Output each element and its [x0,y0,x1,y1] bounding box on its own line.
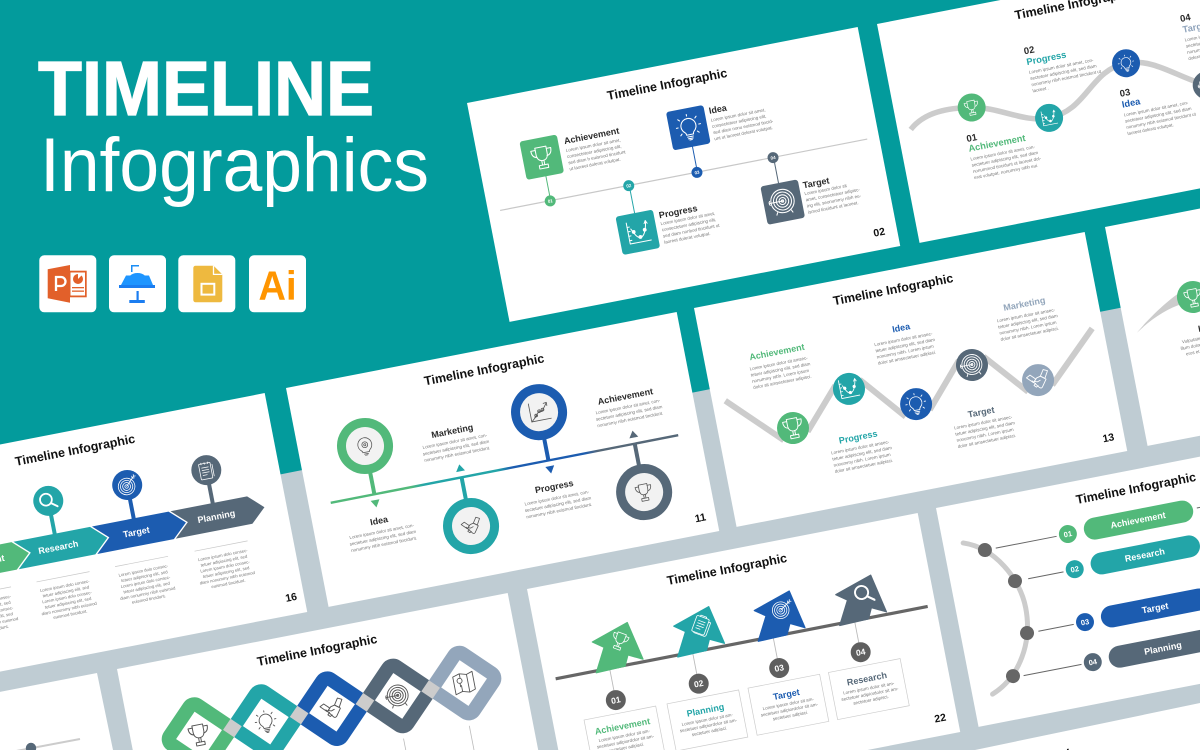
step 4 text: Target [802,175,830,190]
stem and circle: planning [189,453,228,508]
card 3: sectetuer adipiordolor sit am- [760,702,819,718]
panel: slide with pills [936,432,1200,727]
subtitle: Infographics: Infographics [40,123,429,208]
label: Target: nonummy nibh. Lorem ipsum [956,427,1014,443]
label: Achievement: Achievement [597,386,654,407]
step 1 text: ut laoreet dolerat volutpat. [569,157,621,172]
triangle: slate [628,430,638,438]
row 1 [976,494,1200,562]
panel: slide wave timeline (top right) [877,0,1200,243]
row 4 [1004,627,1200,690]
diamond 5 [425,644,503,722]
icon: PowerPoint [39,255,96,312]
title: Timeline Infographic [256,632,378,669]
step 4 icon box: 04 [770,155,776,161]
panel: slide 11 [286,312,719,607]
label: Achievement: Lorem ipsum dolor sit amsec- [749,355,809,371]
diamond 1 [160,696,238,750]
step 1 text: sed diam h euismod tincidunt [568,149,627,165]
label: Progress: sectetuer adipiscing elit, sed diam [524,495,592,513]
step 4: 04 [1179,12,1192,25]
step 3 text [708,94,775,141]
label: Progress: tetuer adipiscing elit, sed diam [832,445,893,462]
connector lines [404,726,476,750]
page number: 16 [284,591,298,605]
step 4 [1179,1,1200,61]
column text 4: euismod tincidunt. [211,578,246,589]
column text 3: euismod tincidunt. [131,593,166,605]
panel: far left slide [0,673,113,750]
connector 3: 03 [774,662,785,674]
label: Target: Target [967,405,995,420]
label: Marketing: Marketing [1002,295,1046,313]
connector 3 [763,635,791,680]
step 3: nonummy nibh euismod tincidunt ut [1126,111,1197,130]
card 4: Lorem ipsum dolor sit am- [843,681,895,696]
label: Idea [871,317,938,366]
row 2: 02 [1070,564,1080,575]
node 2 [1033,101,1065,134]
column text 3: diam nonummy nibh euismod [120,585,176,601]
curve [1131,292,1187,333]
card 2: sectetuer adipisci. [691,725,728,737]
arrow 1 [588,621,644,673]
main title: TIMELINE: TIMELINE [38,46,374,132]
label: Idea: nonummy nibh euismod tincidunt. [351,535,417,553]
label: Idea: Idea [369,514,390,527]
arrow 4 [831,574,887,626]
column text 3: tetuer adipiscing elit, sed [121,569,169,583]
label: Marketing: Lorem ipsum dolor sit amet, con- [422,432,488,450]
step 4 icon box [754,148,805,225]
label: Idea: tetuer adipiscing elit, sed diam [875,337,936,353]
step 2 text: consectetuer adipiscing elit, [661,217,717,232]
arc [963,534,1041,694]
arrow: Planning: Planning [197,508,236,525]
node 2 [830,370,868,408]
diamond 2 [227,683,305,750]
step 1 [966,121,1043,180]
step 2 icon box: 02 [626,183,632,189]
step 2 text [658,199,722,245]
node 1 [774,409,812,447]
label: Progress: dolor sit amsectetuer adipisci. [834,458,893,474]
card 1: Achievement [594,716,651,737]
icon: Adobe Illustrator [249,255,306,312]
card 4: sectetuer adipisci. [853,694,889,706]
panel: slide 13 [694,232,1127,527]
step 1: erat volutpat. nonummy nibh eui. [974,163,1039,180]
panel: slide with diamonds [117,593,550,750]
step 1 text [563,125,628,172]
step 3: Idea [1121,96,1142,110]
card 3: Target [772,687,801,702]
junction 2 [288,704,310,726]
column text 2: diam nonummy nibh euismod [41,601,98,616]
label: Target [951,401,1018,449]
column text 3 [114,556,177,607]
arrow 2 [669,605,725,657]
title: Timeline Infographic [606,66,728,103]
column text 4: tetuer adipiscing elit, sed [200,554,248,568]
arrow: Achievement [0,539,32,585]
pin 2 [438,473,499,554]
panel: slide 22 [527,513,960,750]
panel: far right slide [1105,151,1200,446]
panel: slide 02 [467,27,900,322]
icon: Keynote [109,255,166,312]
step 1: nonummod tincidunt ut laoreet dol- [972,156,1042,174]
junction 3 [354,691,376,713]
step 1: 01 [966,132,979,145]
column text 4 [193,540,257,591]
page number: 11 [694,511,707,525]
step 2 icon box [609,177,660,255]
step 4 text: ing elit, seonummy nibh eu- [806,193,862,209]
label: Achievement [592,385,664,428]
step 2: laoreet . [1032,85,1049,93]
title: Timeline Infographic [1075,470,1197,507]
junction 4 [420,678,442,701]
step 1: Lorem ipsum dolor sit amet, con- [970,144,1036,162]
label: Target: tetuer adipiscing elit, sed diam [955,420,1016,437]
title: Timeline Infographic [832,271,954,308]
label: Achievement [747,341,813,390]
step 2: sectetuer adipiscing elit, sed diam [1030,63,1097,81]
arrow: Target: Target [122,525,150,540]
label: Idea: nonummy nibh. Lorem ipsum [876,344,934,360]
label: Progress: Progress [534,478,574,495]
label: Idea: sectetuer adipiscing elit, sed diam [349,529,417,547]
row 2 [1006,534,1200,592]
step 3: 03 [1119,87,1131,100]
page number: 22 [933,711,947,726]
page number: 02 [872,226,886,240]
background: teal band [0,0,1200,530]
node 4 [1190,69,1200,102]
step 1 icon box: 01 [547,198,554,204]
step 3 [1119,75,1198,136]
wave line [906,35,1200,147]
arrow: Target [92,509,189,554]
card 2: Planning [686,702,725,719]
label: Idea [345,509,418,553]
label: Achievement: tetuer adipiscing elit, sed diam [750,361,811,378]
step 3 text: consectetuer adipiscing elit, [712,113,767,129]
label: Marketing: dolor sit amsectetuer adipisci. [1000,326,1059,342]
label: Idea: Idea [891,321,912,334]
arrow: Research [13,524,110,569]
label: Progress: Lorem ipsum dolor sit amet, con- [524,489,590,507]
step 2: Lorem ipsum dolor sit amet, con- [1029,57,1094,75]
step 2 [1023,33,1103,94]
label: Achievement: nonummy nibh euismod tincidunt. [597,411,664,428]
column text 3: Lorem ipsum dolo consec- [118,563,169,578]
step 1 text: consectetuer adipiscing elit, [567,144,622,159]
stem and circle: target [110,467,149,523]
step 1: Achievement [968,133,1026,154]
column text 1 [0,586,20,637]
card 4: sectetuer adipiordolor sit am- [841,686,899,702]
zigzag line [725,328,1102,450]
card 1: Lorem ipsum dolor sit am- [598,728,651,743]
column text 4: tetuer adipiscing elit, sed [202,565,250,579]
pin 3 [512,385,571,465]
label: Idea: Lorem ipsum dolor sit amet, con- [349,523,415,540]
step 3: Lorem ipsum dolor sit amet, con- [1123,100,1189,118]
card 3: sectetuer adipisci. [772,710,809,721]
label: Achievement: nonummy nibh. Lorem ipsum [752,368,810,384]
label: Progress: Lorem ipsum dolor sit amsec- [831,439,890,455]
connector 4: 04 [855,646,867,658]
node 3 [1110,47,1142,80]
step 3: sectetuer adipiscing elit, sed diam [1125,106,1192,124]
step 2: Progress [1026,50,1067,67]
label: Achievement: sectetuer adipiscing elit, sed diam [595,404,663,422]
step 2: nonummy nibh euismod tincidunt ut [1031,69,1102,87]
panel: bottom right slide [975,703,1200,750]
step 4 text: amet, consectetuer adipisc- [805,187,861,202]
step 1 text: Lorem ipsum dolor sit amet, [565,137,621,153]
row 1: Achievement [1110,510,1166,530]
row 3 [1018,587,1200,645]
card 1: sectetuer adipiordolor sit am- [596,733,655,750]
step 2 text: laoreet dolerat volutpat. [664,231,711,245]
step 2 text: Progress [658,203,698,220]
label: Idea: dolor sit amsectetuer adipisci. [877,350,937,366]
label: Progress: nonummy nibh euismod tincidunt. [526,502,593,519]
label: Marketing: Lorem ipsum dolor sit amsec- [997,307,1056,323]
panel: slide 16 [0,393,307,688]
row 4: 04 [1088,657,1099,668]
label: Progress [828,426,895,474]
label: Marketing: sectetuer adipiscing elit, sed diam [422,439,490,457]
column text 4: Lorem ipsum dolo consec- [200,559,251,574]
card 3: Lorem ipsum dolor sit am- [762,696,815,711]
label: Progress [520,475,593,520]
card 2: Lorem ipsum dolor sit am- [681,712,734,727]
label: Progress: Progress [838,428,878,446]
step 3 icon box [666,105,717,181]
row 2: Research [1124,546,1166,564]
diamond 3 [293,670,371,748]
column text 2: tetuer adipiscing elit, sed [44,596,92,610]
step 3 text: Lorem ipsum dolor sit amet, [710,107,766,123]
label: Marketing [994,293,1061,342]
step 2: 02 [1023,45,1035,57]
triangle: green [371,499,381,508]
title: Timeline Infographic [666,551,788,588]
step 1 icon box [519,134,570,210]
node 5 [1019,361,1057,399]
label: Marketing: nonummy nibh. Lorem ipsum [999,320,1057,336]
column text 3: tetuer adipiscing elit, sed [123,580,171,595]
label: Achievement: Achievement [748,342,805,362]
label: Marketing: tetuer adipiscing elit, sed diam [998,313,1058,330]
node: trophy [1174,278,1200,316]
card 2: sectetuer adipiordolor sit am- [679,717,738,733]
pin 1 [337,418,397,499]
label: Achievement: dolor sit amsectetuer adipisci. [753,374,812,390]
connector 4 [845,619,872,664]
column text 2: tetuer adipiscing elit, sed [42,584,90,598]
gradient timeline axis [330,434,678,504]
step 1: sectetuer adipiscing elit, sed diam [971,150,1039,168]
label: Marketing: nonummy nibh euismod tincidunt. [424,445,491,463]
column text 4: Lorem ipsum dolo consec- [198,548,249,562]
column text 2: Lorem ipsum dolo consec- [42,590,93,604]
step 3 text: Idea [708,102,729,116]
label: Target: dolor sit amsectetuer adipisci. [957,433,1016,449]
card 3 [748,674,829,735]
step 3 icon box: 03 [694,170,700,176]
label: Target: Lorem ipsum dolor sit amsec- [954,414,1013,431]
row 3: Target [1141,601,1169,615]
column text 2 [35,571,99,622]
column text 2: euismod tincidunt. [53,608,88,620]
triangle: teal [455,463,465,472]
junction 1 [221,717,244,739]
arrow: Planning [170,493,267,539]
row 4: Planning [1143,640,1183,657]
node 1 [955,91,988,124]
thick axis [555,605,928,680]
connector 2 [683,651,710,695]
step 2 text: sed diam nonbod tincidunt ut [663,223,721,239]
icon: Google Slides [178,255,235,312]
card 1 [584,706,665,750]
column text 4: diam nonummy nibh euismod [199,570,256,586]
arrow: Research: Research [37,538,79,556]
card 2 [667,690,748,750]
step 3 text: sed diam nonu euismod tincid- [713,118,774,135]
arrow 3 [750,589,806,641]
card 4: Research [846,670,888,688]
node 3 [897,385,935,423]
row 3: 03 [1080,617,1090,627]
column text 2: Lorem ipsum dolo consec- [40,578,91,593]
column text 3: Lorem ipsum dolo consec- [120,574,171,589]
connector 1 [600,667,628,712]
card 4 [828,659,909,720]
row 1: 01 [1063,529,1073,539]
diamond 4 [359,657,437,735]
step 3: laoreet dolerat volutpat. [1127,122,1174,136]
label: Marketing: Marketing [430,422,474,440]
step 3 text: unt ut laoreet dolerat volutpat. [714,125,773,141]
pin 4 [612,439,672,520]
label: Idea: Lorem ipsum dolor sit amsec- [874,331,933,347]
timeline axis [500,139,867,211]
label: Marketing [419,420,491,463]
step 1 text: Achievement [563,126,620,146]
step 4 text: ismod tincidunt ut laoreet. [808,200,859,215]
triangle: blue [545,465,556,474]
step 4 text: Lorem ipsum dolor sit [804,183,848,196]
node 4 [953,346,991,384]
page number: 13 [1102,431,1116,445]
label: Progress: nonummy nibh. Lorem ipsum [833,452,891,468]
label: Achievement: Lorem ipsum dolor sit amet, con- [595,398,661,415]
icon: Adobe Illustrator: Ai [258,262,296,308]
title: Timeline Infographic [14,432,136,469]
title: Timeline Infographic [423,351,545,388]
step 2 text: Lorem ipsum dolor sit amet, [660,211,716,226]
connector 2: 02 [693,678,705,689]
stem and circle: search [31,483,70,539]
step 4 text [802,170,863,215]
connector 1: 01 [610,694,622,706]
